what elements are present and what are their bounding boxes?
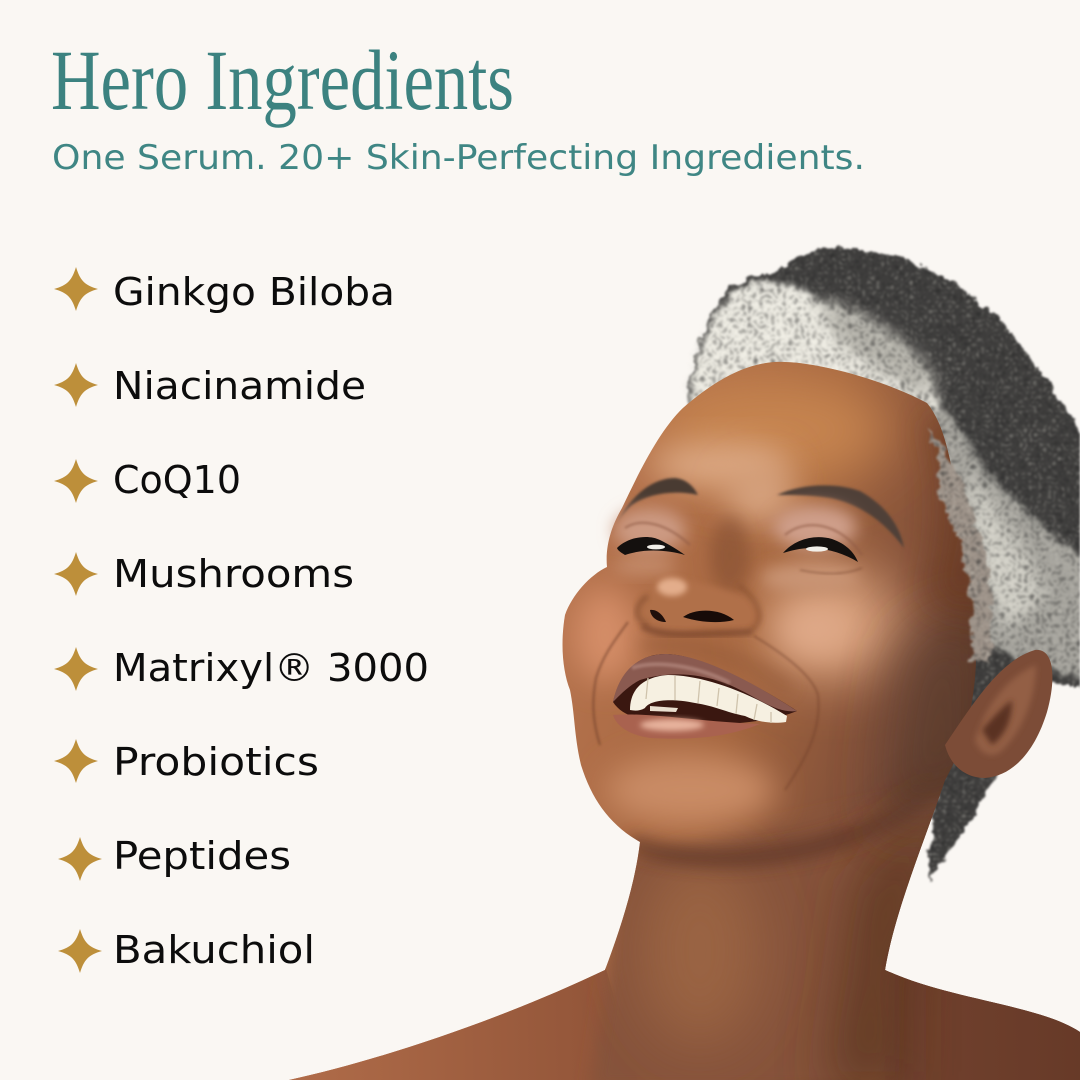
item: CoQ10: CoQ10 <box>113 458 241 502</box>
item: Peptides <box>58 834 291 881</box>
shoulders <box>280 960 1080 1080</box>
item: Peptides: Peptides <box>113 834 291 878</box>
item: Probiotics: Probiotics <box>113 740 319 784</box>
subtitle: One Serum. 20+ Skin-Perfecting Ingredients. <box>52 138 865 178</box>
item: Matrixyl 3000: Matrixyl® 3000 <box>113 646 429 690</box>
forehead glow <box>650 375 890 485</box>
portrait of smiling woman <box>280 248 1080 1080</box>
item: Bakuchiol <box>58 928 315 973</box>
ingredient list <box>54 267 429 973</box>
nose <box>637 578 760 634</box>
upper lip <box>613 654 797 711</box>
right eyebrow <box>777 485 904 548</box>
cheek right <box>765 570 905 680</box>
item: CoQ10 <box>54 458 241 503</box>
mouth interior <box>613 654 797 724</box>
item: Niacinamide: Niacinamide <box>113 364 366 408</box>
left eye <box>614 508 690 555</box>
cheek left <box>573 587 637 683</box>
mouth surround shadow <box>642 638 779 682</box>
item: Ginkgo Biloba: Ginkgo Biloba <box>113 270 395 314</box>
shaded side of face <box>887 600 985 830</box>
lower lip <box>613 714 760 739</box>
right eye <box>773 505 862 562</box>
title: Hero Ingredients <box>51 32 514 128</box>
neck tone <box>590 790 950 1080</box>
left eyebrow <box>612 478 698 535</box>
hair <box>686 248 1080 880</box>
under-jaw shadow <box>628 801 920 874</box>
teeth <box>630 675 787 723</box>
ear <box>945 650 1052 778</box>
chin <box>605 754 775 826</box>
temple frizz <box>925 425 992 665</box>
smile lines <box>593 568 862 790</box>
smile <box>613 654 797 739</box>
item: Probiotics <box>54 739 319 784</box>
under eye <box>760 564 860 592</box>
side of nose shadow <box>710 517 750 593</box>
item: Bakuchiol: Bakuchiol <box>113 928 315 972</box>
item: Mushrooms: Mushrooms <box>113 552 354 596</box>
skin: face, neck and shoulders <box>280 350 1080 1080</box>
